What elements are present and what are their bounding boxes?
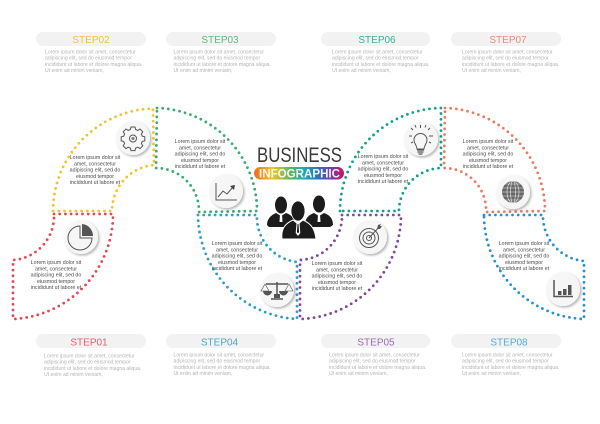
panel: step 03 header: incididunt ut labore et dolore magna aliqua.	[174, 62, 271, 68]
panel: step 04 header: incididunt ut labore et dolore magna aliqua.	[174, 365, 271, 371]
panel: step 07 header: Lorem ipsum dolor sit amet, consectetur	[462, 50, 553, 56]
body text: step 06: Lorem ipsum dolor sit	[358, 154, 409, 160]
icon: gear	[116, 121, 150, 155]
panel: step 07 header: adipiscing elit, sed do eiusmod tempor	[462, 56, 549, 62]
body text: step 03: eiusmod tempor	[181, 158, 219, 164]
title: infographic pill: INFOGRAPHIC	[259, 166, 340, 180]
body text: step 04	[212, 241, 263, 272]
panel: step 05 header: STEP05	[357, 338, 395, 348]
panel: step 07 header: Ut enim ad minim veniam,	[462, 68, 521, 74]
panel: step 01 header: Ut enim ad minim veniam,	[44, 372, 103, 378]
dotted shape: step 02	[53, 108, 154, 211]
body text: step 05: amet, consectetur	[316, 267, 358, 273]
dotted shape: step 01	[13, 214, 113, 319]
icon: line chart	[209, 174, 243, 208]
panel: step 06 header	[321, 32, 430, 74]
panel: step 02 header: STEP02	[72, 35, 110, 46]
body text: step 03	[175, 139, 226, 170]
body text: step 06: incididunt ut labore et	[358, 179, 409, 185]
panel: step 02 header: Lorem ipsum dolor sit amet, consectetur	[45, 50, 136, 56]
body text: step 06: eiusmod tempor	[364, 173, 402, 179]
panel: step 06 header: Lorem ipsum dolor sit amet, consectetur	[332, 50, 423, 56]
body text: step 08: Lorem ipsum dolor sit	[499, 241, 550, 247]
panel: step 08 header: incididunt ut labore et dolore magna aliqua.	[462, 365, 559, 371]
panel: step 07 header: incididunt ut labore et dolore magna aliqua.	[462, 62, 559, 68]
panel: step 03 header	[166, 32, 276, 74]
icon: globe	[496, 175, 530, 209]
panel: step 01 header: STEP01	[70, 338, 108, 348]
body text: step 06: adipiscing elit, sed do	[358, 167, 408, 173]
body text: step 07: amet, consectetur	[467, 145, 509, 151]
body text: step 08: incididunt ut labore et	[499, 266, 550, 272]
body text: step 01: incididunt ut labore et	[31, 285, 82, 291]
body text: step 01	[31, 260, 82, 291]
body text: step 07: incididunt ut labore et	[463, 164, 514, 170]
panel: step 04 header: adipiscing elit, sed do eiusmod tempor	[174, 359, 260, 365]
panel: step 08 header: adipiscing elit, sed do eiusmod tempor	[462, 359, 549, 365]
body text: step 02	[70, 155, 121, 186]
panel: step 02 header	[36, 32, 146, 74]
panel: step 05 header	[321, 334, 430, 377]
body text: step 04: eiusmod tempor	[218, 260, 256, 266]
body text: step 01: adipiscing elit, sed do	[31, 273, 81, 279]
panel: step 07 header	[451, 32, 561, 74]
body text: step 02: adipiscing elit, sed do	[70, 168, 120, 174]
body text: step 08	[499, 241, 550, 272]
panel: step 01 header: Lorem ipsum dolor sit amet, consectetur	[44, 354, 135, 360]
body text: step 02: eiusmod tempor	[76, 174, 114, 180]
body text: step 05: eiusmod tempor	[318, 280, 356, 286]
title: business: BUSINESS	[257, 144, 342, 167]
panel: step 02 header: adipiscing elit, sed do eiusmod tempor	[45, 56, 132, 62]
body text: step 03: incididunt ut labore et	[175, 164, 226, 170]
icon: light bulb	[404, 122, 438, 156]
panel: step 08 header: Lorem ipsum dolor sit amet, consectetur	[462, 352, 553, 358]
panel: step 02 header: Ut enim ad minim veniam,	[45, 68, 104, 74]
panel: step 06 header: adipiscing elit, sed do eiusmod tempor	[332, 56, 419, 62]
body text: step 07	[463, 139, 514, 170]
body text: step 01: Lorem ipsum dolor sit	[31, 260, 82, 266]
icon: balance scale	[260, 273, 294, 307]
body text: step 03: amet, consectetur	[179, 145, 221, 151]
panel: step 05 header: Lorem ipsum dolor sit amet, consectetur	[329, 352, 420, 358]
body text: step 08: amet, consectetur	[503, 247, 545, 253]
icon: target	[353, 220, 387, 254]
body text: step 03: Lorem ipsum dolor sit	[175, 139, 226, 145]
panel: step 03 header: STEP03	[201, 35, 239, 46]
body text: step 05: incididunt ut labore et	[312, 286, 363, 292]
icon: business people	[267, 196, 333, 239]
icon: pie chart	[64, 220, 98, 254]
body text: step 08: eiusmod tempor	[505, 260, 543, 266]
panel: step 04 header: Ut enim ad minim veniam,	[174, 371, 232, 377]
panel: step 03 header: Lorem ipsum dolor sit amet, consectetur	[174, 50, 264, 56]
panel: step 08 header: Ut enim ad minim veniam,	[462, 371, 521, 377]
panel: step 04 header: Lorem ipsum dolor sit amet, consectetur	[174, 352, 264, 358]
body text: step 03: adipiscing elit, sed do	[175, 152, 225, 158]
icon: bar chart	[546, 272, 580, 306]
body text: step 04: Lorem ipsum dolor sit	[212, 241, 263, 247]
panel: step 01 header	[36, 334, 146, 378]
panel: step 05 header: Ut enim ad minim veniam,	[329, 371, 388, 377]
panel: step 03 header: adipiscing elit, sed do eiusmod tempor	[174, 56, 260, 62]
body text: step 01: amet, consectetur	[35, 266, 77, 272]
dotted shape: step 04	[198, 215, 297, 319]
body text: step 08: adipiscing elit, sed do	[499, 254, 549, 260]
panel: step 05 header: adipiscing elit, sed do eiusmod tempor	[329, 359, 416, 365]
panel: step 03 header: Ut enim ad minim veniam,	[174, 68, 232, 74]
dotted shape: step 08	[484, 215, 584, 319]
dotted shape: step 03	[156, 108, 257, 212]
panel: step 01 header: incididunt ut labore et dolore magna aliqua.	[44, 366, 141, 372]
body text: step 04: amet, consectetur	[216, 247, 258, 253]
body text: step 05: Lorem ipsum dolor sit	[312, 261, 363, 267]
panel: step 04 header	[166, 334, 276, 377]
panel: step 08 header	[451, 334, 561, 377]
body text: step 07: eiusmod tempor	[469, 158, 507, 164]
panel: step 01 header: adipiscing elit, sed do eiusmod tempor	[44, 360, 131, 366]
panel: step 08 header: STEP08	[490, 338, 528, 348]
body text: step 04: incididunt ut labore et	[212, 266, 263, 272]
body text: step 05	[312, 261, 363, 292]
body text: step 06	[358, 154, 409, 185]
body text: step 07: Lorem ipsum dolor sit	[463, 139, 514, 145]
body text: step 04: adipiscing elit, sed do	[212, 254, 262, 260]
panel: step 06 header: incididunt ut labore et dolore magna aliqua.	[332, 62, 429, 68]
body text: step 01: eiusmod tempor	[37, 279, 75, 285]
panel: step 04 header: STEP04	[201, 338, 239, 348]
body text: step 02: amet, consectetur	[74, 161, 116, 167]
body text: step 07: adipiscing elit, sed do	[463, 152, 513, 158]
dotted shape: step 06	[340, 108, 441, 211]
panel: step 07 header: STEP07	[489, 35, 527, 46]
panel: step 02 header: incididunt ut labore et dolore magna aliqua.	[45, 62, 142, 68]
body text: step 02: incididunt ut labore et	[70, 180, 121, 186]
panel: step 06 header: STEP06	[358, 35, 396, 46]
body text: step 05: adipiscing elit, sed do	[312, 274, 362, 280]
dotted shape: step 05	[300, 215, 401, 319]
body text: step 06: amet, consectetur	[362, 160, 404, 166]
panel: step 05 header: incididunt ut labore et dolore magna aliqua.	[329, 365, 426, 371]
body text: step 02: Lorem ipsum dolor sit	[70, 155, 121, 161]
dotted shape: step 07	[444, 108, 545, 212]
panel: step 06 header: Ut enim ad minim veniam,	[332, 68, 391, 74]
